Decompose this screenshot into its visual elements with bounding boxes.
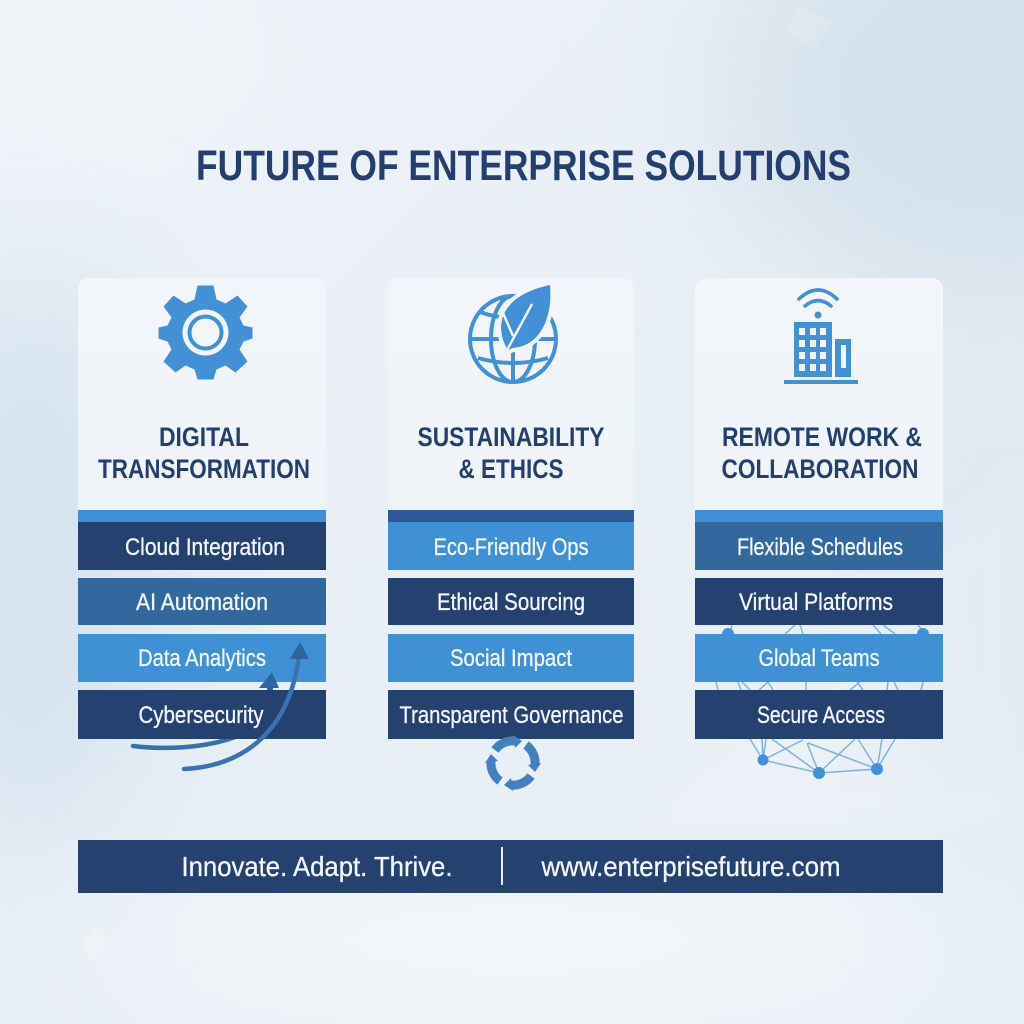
item: flexible schedules: Flexible Schedules	[737, 534, 903, 561]
card	[388, 278, 634, 518]
icon: growth arrow tail	[133, 737, 235, 748]
footer banner	[78, 840, 943, 893]
item: eco-friendly ops: Eco-Friendly Ops	[434, 534, 588, 561]
item: ethical sourcing	[388, 578, 634, 625]
tagline: Innovate. Adapt. Thrive.	[182, 851, 452, 882]
accent bar	[695, 510, 943, 522]
heading: & ETHICS	[458, 454, 564, 484]
accent bar	[388, 510, 634, 522]
item: secure access	[695, 690, 943, 739]
icon: network mesh	[716, 625, 929, 779]
item: secure access: Secure Access	[757, 702, 885, 729]
item: social impact	[388, 634, 634, 682]
heading: DIGITAL	[159, 422, 249, 452]
heading: SUSTAINABILITY	[418, 422, 604, 452]
item: eco-friendly ops	[388, 522, 634, 570]
item: virtual platforms	[695, 578, 943, 625]
heading: REMOTE WORK &	[722, 422, 922, 452]
item: flexible schedules	[695, 522, 943, 570]
item: cybersecurity: Cybersecurity	[138, 702, 264, 729]
icon: globe with leaf	[470, 285, 556, 382]
heading: COLLABORATION	[722, 454, 918, 484]
item: social impact: Social Impact	[450, 645, 572, 672]
card	[78, 278, 326, 518]
panel: sustainability and ethics	[388, 278, 634, 791]
item: virtual platforms: Virtual Platforms	[739, 589, 893, 616]
card	[695, 278, 943, 518]
panel: digital transformation	[78, 278, 326, 769]
icon: recycle loop	[485, 735, 541, 791]
item: ethical sourcing: Ethical Sourcing	[437, 589, 585, 616]
item: transparent governance	[388, 690, 634, 739]
item: cloud integration	[78, 522, 326, 570]
icon: growth arrows	[184, 642, 309, 769]
heading: TRANSFORMATION	[98, 454, 310, 484]
item: cloud integration: Cloud Integration	[125, 534, 285, 561]
item: ai automation: AI Automation	[136, 589, 268, 616]
accent bar	[78, 510, 326, 522]
icon: gear	[158, 286, 252, 380]
item: global teams	[695, 634, 943, 682]
item: transparent governance: Transparent Governance	[400, 702, 624, 729]
item: ai automation	[78, 578, 326, 625]
icon: wifi building	[784, 290, 858, 384]
item: global teams: Global Teams	[758, 645, 880, 672]
website: www.enterprisefuture.com	[541, 851, 840, 882]
item: data analytics	[78, 634, 326, 682]
item: data analytics: Data Analytics	[138, 645, 266, 672]
panel: remote work and collaboration	[695, 278, 943, 779]
title: FUTURE OF ENTERPRISE SOLUTIONS	[196, 142, 851, 190]
item: cybersecurity	[78, 690, 326, 739]
